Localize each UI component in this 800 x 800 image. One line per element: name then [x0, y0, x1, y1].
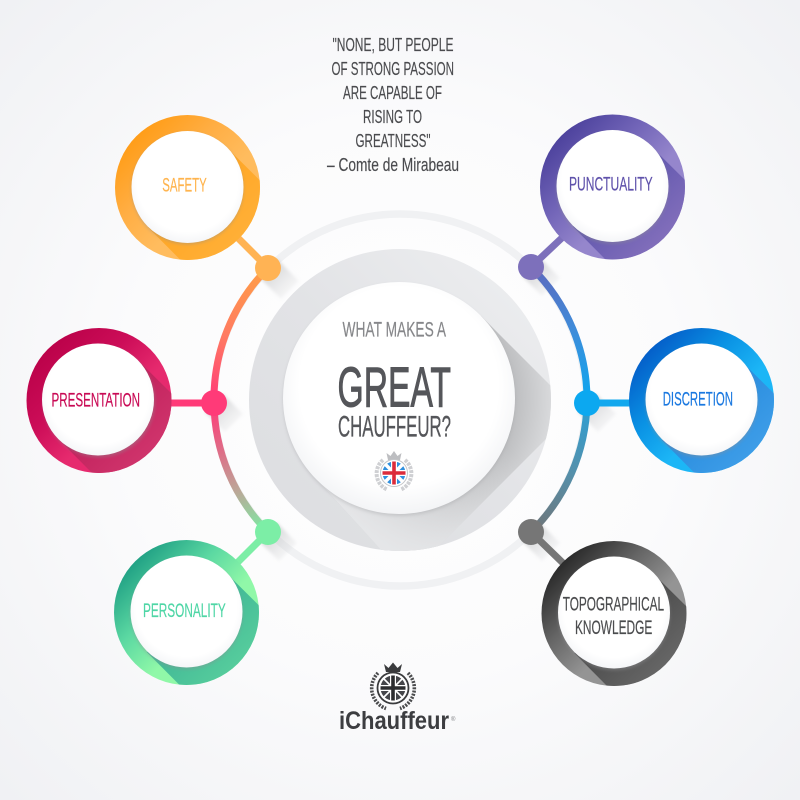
panel: discretion [629, 328, 774, 473]
panel: topographical knowledge [542, 541, 686, 686]
panel: safety: SAFETY [162, 175, 207, 197]
logo: iChauffeur wordmark: ® [451, 716, 456, 723]
panel: safety [115, 115, 260, 260]
outer light ring [214, 214, 586, 586]
quote: RISING TO [363, 107, 422, 127]
quote: – Comte de Mirabeau [327, 155, 459, 175]
panel: presentation: PRESENTATION [52, 390, 140, 412]
quote: GREATNESS" [356, 131, 430, 151]
heading: what makes a great chauffeur: GREAT [338, 356, 451, 420]
quote: "NONE, BUT PEOPLE [332, 35, 454, 55]
panel: presentation [26, 328, 172, 473]
panel: personality [114, 540, 259, 685]
heading: what makes a great chauffeur [338, 318, 451, 444]
connectors [150, 235, 640, 565]
heading: what makes a great chauffeur: CHAUFFEUR? [338, 410, 451, 444]
quote [327, 35, 459, 175]
panel: discretion: DISCRETION [663, 389, 733, 411]
panel: punctuality [540, 114, 685, 260]
coloured arcs [214, 267, 587, 532]
node shadows [205, 258, 616, 561]
logo: iChauffeur crest [372, 662, 414, 708]
logo: iChauffeur wordmark: iChauffeur [339, 707, 449, 735]
panel: topographical knowledge: KNOWLEDGE [575, 617, 652, 639]
quote: ARE CAPABLE OF [343, 83, 442, 103]
central grey disc [249, 249, 551, 551]
icon: crest with union flag [377, 451, 411, 490]
panel: punctuality: PUNCTUALITY [569, 174, 653, 196]
nodes [201, 254, 600, 545]
panel: topographical knowledge: TOPOGRAPHICAL [563, 594, 664, 616]
long shadow of central disc [384, 316, 551, 551]
panel: personality: PERSONALITY [143, 600, 226, 622]
heading: what makes a great chauffeur: WHAT MAKES A [342, 318, 446, 342]
quote: OF STRONG PASSION [332, 59, 454, 79]
central white disc [283, 282, 515, 516]
